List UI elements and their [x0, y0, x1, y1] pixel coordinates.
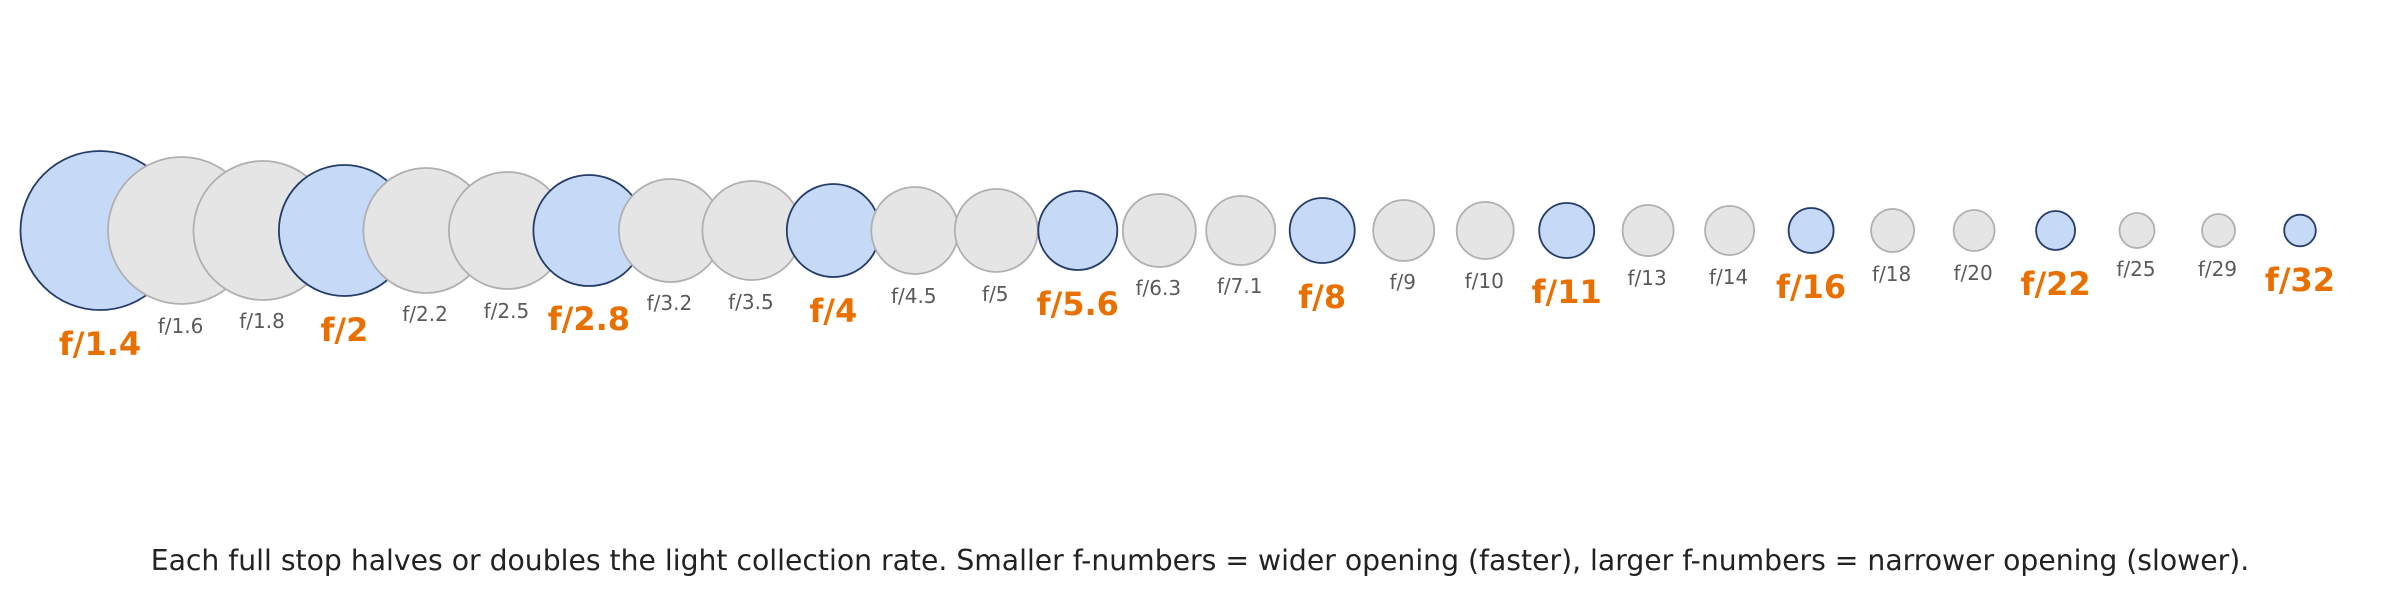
stop f/7.1: f/7.1: [1217, 274, 1262, 298]
stop f/2.5: [449, 172, 566, 323]
stop f/5.6: f/5.6: [1037, 285, 1119, 323]
stop f/1.6: [108, 157, 255, 338]
stop f/1.8: f/1.8: [239, 309, 285, 333]
stop f/1.8: [194, 161, 332, 333]
stop f/3.2: f/3.2: [647, 291, 692, 315]
stop f/2: [279, 165, 410, 349]
stop f/25: [2116, 213, 2156, 281]
stop f/29: f/29: [2198, 257, 2237, 281]
stop f/13: f/13: [1627, 266, 1667, 290]
stop f/20: [1953, 210, 1995, 285]
stop f/5: f/5: [982, 282, 1009, 306]
stop f/29: [2198, 214, 2237, 281]
stop f/7.1: [1206, 196, 1275, 298]
stop f/14: [1705, 206, 1754, 289]
stop f/10: [1457, 202, 1514, 293]
stop f/5.6: [1037, 191, 1119, 323]
stop f/2.5: f/2.5: [484, 299, 529, 323]
aperture scale row: [20, 151, 2335, 363]
stop f/13: [1623, 205, 1674, 290]
stop f/18: [1871, 209, 1914, 286]
stop f/11: [1532, 203, 1602, 311]
stop f/14: f/14: [1709, 265, 1748, 289]
stop f/9: f/9: [1389, 270, 1416, 294]
stop f/10: f/10: [1465, 269, 1504, 293]
stop f/1.4: f/1.4: [59, 325, 141, 363]
stop f/16: f/16: [1776, 268, 1846, 306]
stop f/1.6: f/1.6: [158, 314, 203, 338]
stop f/3.2: [619, 179, 722, 315]
stop f/22: f/22: [2021, 265, 2091, 303]
stop f/6.3: [1123, 194, 1196, 300]
stop f/4: f/4: [809, 292, 857, 330]
stop f/25: f/25: [2116, 257, 2156, 281]
stop f/2.8: f/2.8: [548, 300, 630, 338]
stop f/20: f/20: [1953, 261, 1993, 285]
stop f/22: [2021, 211, 2091, 303]
stop f/3.5: [702, 181, 801, 314]
stop f/3.5: f/3.5: [728, 290, 774, 314]
stop f/8: f/8: [1298, 278, 1346, 316]
stop f/6.3: f/6.3: [1136, 276, 1181, 300]
stop f/4.5: [871, 187, 958, 308]
stop f/11: f/11: [1532, 273, 1602, 311]
stop f/9: [1373, 200, 1434, 294]
stop f/16: [1776, 208, 1846, 306]
stop f/2: f/2: [320, 311, 368, 349]
caption: Each full stop halves or doubles the light collection rate. Smaller f-numbers = wider opening (faster), larger f-numbers = narrower opening (slower).: [151, 544, 2249, 577]
stop f/8: [1290, 198, 1355, 316]
stop f/18: f/18: [1872, 262, 1911, 286]
stop f/1.4: [20, 151, 180, 363]
stop f/32: [2265, 215, 2335, 299]
stop f/4: [787, 184, 880, 330]
stop f/2.2: f/2.2: [402, 302, 448, 326]
stop f/5: [955, 189, 1038, 306]
stop f/4.5: f/4.5: [891, 284, 937, 308]
stop f/2.2: [363, 168, 488, 326]
stop f/32: f/32: [2265, 261, 2335, 299]
stop f/2.8: [533, 175, 644, 338]
